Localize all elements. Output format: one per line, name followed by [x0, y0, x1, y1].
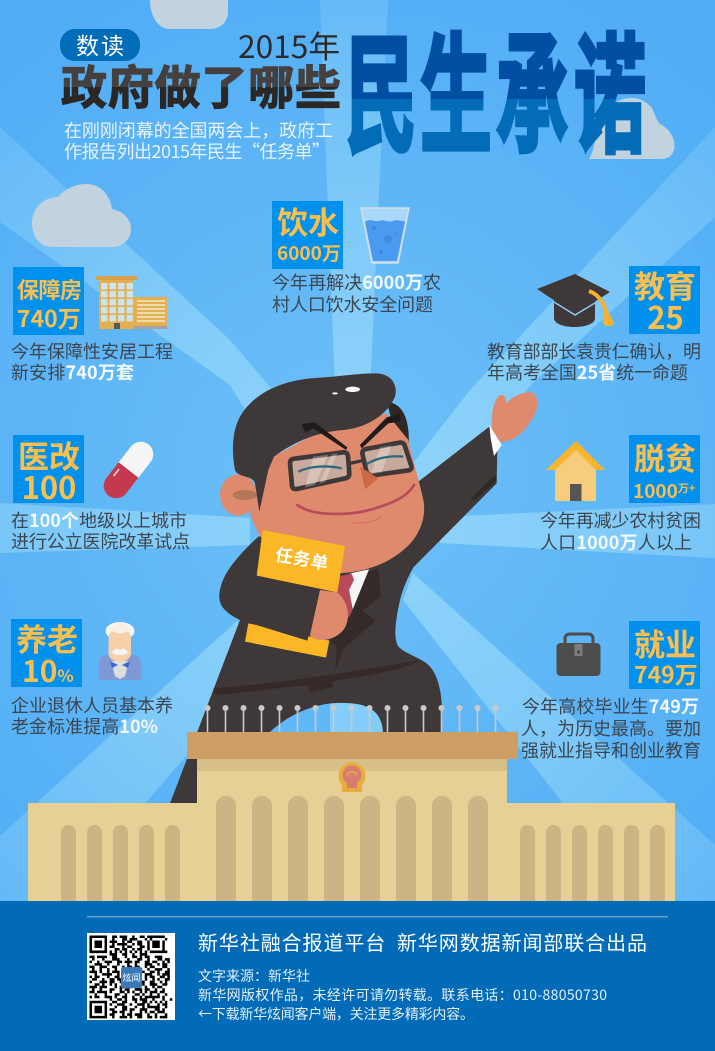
frieze: [197, 759, 507, 771]
footer band: [0, 901, 715, 1051]
cloud left: [32, 184, 131, 247]
icon: briefcase: [556, 634, 600, 676]
stat box: 100: [22, 463, 76, 508]
stat box: [11, 615, 82, 691]
title block: [60, 0, 646, 180]
forearm: [219, 560, 320, 641]
stat box: [629, 434, 700, 504]
description: 企业退休人员基本养: [11, 692, 173, 718]
hand on book: [310, 590, 348, 640]
badge: 数读: [60, 27, 140, 61]
hair: [233, 373, 396, 512]
shirt cuff: [489, 425, 502, 456]
glasses: [290, 443, 412, 489]
icon: water glass: [361, 208, 409, 263]
inner ear: [233, 490, 257, 500]
sleeve buttons: [470, 475, 497, 500]
panel: 饮水: [272, 198, 441, 317]
panel: 医改: [11, 432, 190, 554]
stat box: 25: [647, 293, 684, 338]
stat box: 饮水: [277, 198, 339, 243]
description: 人，为历史最高。要加: [521, 715, 701, 741]
stat box: [629, 262, 700, 338]
description: 进行公立医院改革试点: [11, 528, 190, 554]
back hair: [387, 402, 409, 447]
description: 今年再减少农村贫困: [540, 507, 701, 533]
stat box: 10%: [22, 647, 74, 691]
stat box: 脱贫: [634, 434, 696, 479]
side wings: [28, 803, 675, 901]
columns: [61, 796, 665, 901]
description: [272, 269, 441, 317]
national emblem: [338, 762, 366, 792]
description: 教育部部长袁贵仁确认，明: [487, 338, 701, 364]
footer credits: [198, 966, 607, 1024]
description: 在100个地级以上城市: [11, 507, 187, 533]
task list upper cover: [257, 530, 345, 592]
roof: [187, 732, 518, 759]
description: 今年高校毕业生749万: [522, 693, 699, 719]
footer credits: 新华网版权作品，未经许可请勿转载。联系电话：010-88050730: [198, 985, 607, 1005]
description: 年高考全国25省统一命题: [487, 359, 688, 385]
flag poles: [204, 705, 498, 732]
jacket: [170, 427, 497, 803]
panel: 养老: [11, 615, 173, 739]
panel: 就业: [521, 620, 701, 763]
stat box: 749万: [634, 656, 698, 690]
face: [250, 413, 424, 573]
footer heading: 新华社融合报道平台 新华网数据新闻部联合出品: [198, 927, 647, 956]
nose: [360, 467, 378, 489]
description: [11, 692, 173, 739]
great hall building: [28, 705, 675, 901]
intro text: 在刚刚闭幕的全国两会上，政府工: [64, 117, 333, 143]
ear: [220, 474, 257, 516]
task list label: 任务单: [274, 541, 330, 575]
icon: old man: [99, 622, 141, 680]
description: [11, 338, 173, 385]
intro text: 作报告列出2015年民生“任务单”: [64, 138, 330, 164]
stat box: 1000: [633, 477, 678, 504]
stat box: 养老: [16, 615, 78, 660]
stat box: [13, 432, 84, 508]
raised hand: [492, 392, 537, 442]
cloud top: [150, 0, 228, 29]
stat box: [629, 620, 700, 690]
description: 老金标准提高10%: [11, 713, 158, 739]
stat box: 教育: [634, 262, 696, 307]
description: [11, 507, 190, 554]
QR code: [87, 933, 175, 1020]
mouth: [297, 485, 414, 514]
hair highlight: [345, 387, 360, 392]
stat box: [13, 267, 84, 335]
description: 强就业指导和创业教育: [521, 737, 701, 763]
shirt collar: [349, 569, 369, 609]
description: [487, 338, 701, 385]
stat box: 万+: [678, 480, 696, 496]
title: 2015年: 2015年: [238, 22, 340, 67]
right eyebrow: [360, 413, 400, 448]
description: 人口1000万人以上: [540, 529, 692, 555]
belt shadow: [213, 660, 420, 695]
task list lower cover: [245, 623, 329, 658]
central hall: [197, 759, 507, 901]
stat box: 740万: [17, 300, 81, 334]
icon: building: [96, 276, 167, 329]
chin line: [353, 517, 382, 523]
stat box: 保障房: [17, 273, 82, 305]
description: [521, 693, 701, 763]
description: 今年保障性安居工程: [11, 338, 173, 364]
cloud right: [589, 98, 674, 159]
lapel: [329, 568, 381, 672]
stat box: 6000万: [277, 239, 341, 266]
stat box: 医改: [18, 432, 80, 477]
panel: 保障房: [11, 267, 173, 385]
hair highlight small: [332, 392, 338, 394]
badge: 数读: 数读: [76, 27, 124, 61]
footer credits: ←下载新华炫闻客户端，关注更多精彩内容。: [198, 1004, 474, 1024]
stat box: 就业: [634, 620, 696, 665]
description: 今年再解决6000万农: [272, 269, 441, 295]
intro text: [64, 117, 333, 164]
description: 村人口饮水安全问题: [272, 291, 433, 317]
panel: 脱贫: [540, 434, 701, 555]
footer credits: 文字来源：新华社: [198, 966, 310, 986]
icon: graduation cap: [537, 274, 614, 327]
QR logo: 炫闻: [122, 971, 141, 984]
left eyebrow: [302, 422, 347, 450]
description: 新安排740万套: [11, 359, 134, 385]
icon: house: [546, 441, 605, 501]
panel: 教育: [487, 262, 701, 385]
tie: [337, 573, 354, 639]
title: 政府做了哪些: 政府做了哪些: [61, 52, 341, 118]
icon: pill: [99, 437, 158, 503]
description: [540, 507, 701, 555]
character: official holding task list: [170, 373, 537, 803]
stat box: [272, 198, 343, 269]
